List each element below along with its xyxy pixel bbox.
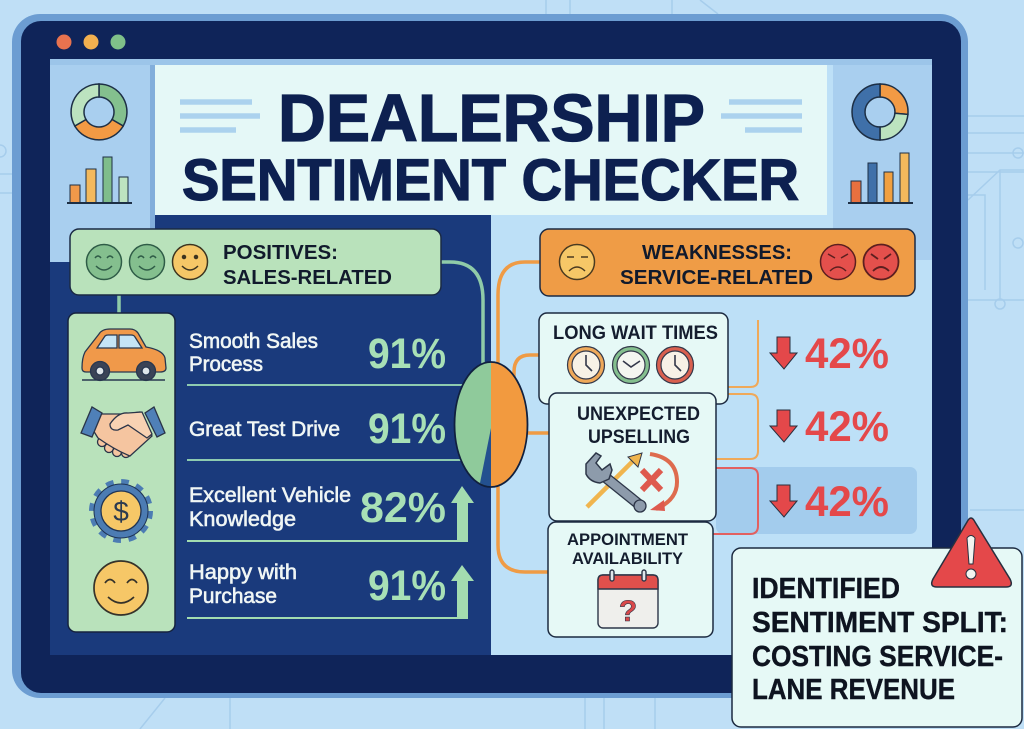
stat: first decline: 42% (805, 330, 889, 378)
icon: left donut chart (71, 84, 127, 140)
icon: neutral face (560, 244, 594, 280)
icon: angry face two (864, 244, 898, 280)
icon: gear with dollar sign (92, 482, 150, 540)
row: excellent vehicle knowledge: 82% (360, 484, 446, 532)
stat: third decline (770, 478, 889, 526)
callout: SENTIMENT SPLIT: (752, 607, 1008, 639)
icon: calendar (598, 570, 658, 628)
card: unexpected upselling: UPSELLING (588, 427, 690, 448)
right sidebar (833, 65, 932, 260)
icon: yellow face (172, 244, 208, 280)
icon: green face one (86, 244, 122, 280)
stat: third decline: 42% (805, 478, 889, 526)
icon: handshake (81, 407, 165, 458)
card: long wait times (539, 313, 728, 404)
row: great test drive: 91% (368, 405, 446, 453)
positives header (70, 229, 441, 295)
callout: IDENTIFIED (752, 573, 900, 605)
row: smooth sales process: Smooth Sales (189, 330, 318, 353)
icon: calendar: ? (619, 595, 637, 628)
icon: warning triangle (932, 518, 1011, 587)
weaknesses heading text: WEAKNESSES: (642, 242, 792, 264)
icon: orange clock (568, 346, 604, 384)
positives heading text: SALES-RELATED (223, 267, 392, 289)
left sidebar (50, 65, 155, 262)
icon: return arrow (650, 454, 677, 509)
weaknesses heading text: SERVICE-RELATED (620, 267, 813, 289)
row: happy with purchase: Happy with (189, 561, 297, 584)
row: excellent vehicle knowledge (187, 484, 474, 542)
icon: red cross (642, 470, 661, 490)
stat: first decline (770, 330, 889, 378)
icon: left bar chart (67, 157, 132, 203)
arrow: up trend one (187, 486, 474, 542)
card: appointment availability: AVAILABILITY (572, 549, 684, 568)
icon: right donut chart (852, 84, 908, 140)
row: smooth sales process: 91% (368, 330, 446, 378)
row: smooth sales process (187, 330, 465, 385)
icon: angry face one (820, 244, 856, 280)
title panel (150, 65, 827, 230)
icon: upsell arrow (587, 458, 636, 507)
icon: smiling face (94, 561, 148, 615)
callout: LANE REVENUE (752, 674, 955, 706)
positives heading text (223, 242, 392, 289)
title text (182, 81, 799, 213)
row: excellent vehicle knowledge: Excellent Vehicle (189, 484, 351, 507)
row: great test drive (187, 405, 462, 460)
stat: second decline: 42% (805, 403, 889, 451)
row: happy with purchase: Purchase (189, 585, 277, 608)
icon: green clock (612, 346, 650, 384)
row: great test drive: Great Test Drive (189, 418, 340, 441)
window control dots (56, 34, 126, 50)
card: appointment availability (548, 522, 713, 637)
positives heading text: POSITIVES: (223, 242, 338, 264)
icon: car (82, 329, 166, 380)
split oval (454, 362, 528, 487)
icon: right bar chart (848, 153, 913, 203)
icon: wrench (586, 453, 646, 512)
title text: DEALERSHIP (278, 81, 705, 156)
icon: green face two (130, 244, 164, 280)
icon: red clock (656, 346, 694, 384)
card: unexpected upselling: UNEXPECTED (577, 404, 700, 425)
callout (732, 518, 1022, 727)
row: smooth sales process: Process (189, 353, 263, 376)
connector: green sales line (119, 262, 483, 365)
dark positives panel background (50, 215, 491, 655)
row: excellent vehicle knowledge: Knowledge (189, 508, 296, 531)
title text: SENTIMENT CHECKER (182, 148, 799, 213)
row: happy with purchase: 91% (368, 562, 446, 610)
connector brackets (716, 320, 758, 459)
highlight band for third percentage (716, 467, 917, 534)
card: appointment availability: APPOINTMENT (567, 530, 689, 549)
row: happy with purchase (187, 561, 474, 619)
weaknesses header (540, 229, 915, 296)
callout: COSTING SERVICE- (752, 641, 1003, 673)
panel: positive icons (68, 313, 175, 632)
icon: return arrow head (650, 500, 665, 511)
connector: orange service lines (498, 262, 550, 572)
weaknesses heading text (620, 242, 813, 289)
connector bracket red (713, 468, 758, 534)
icon: gear with dollar sign: $ (113, 496, 129, 527)
stat: second decline (770, 403, 889, 451)
card: long wait times: LONG WAIT TIMES (553, 323, 718, 344)
card: unexpected upselling (549, 393, 716, 521)
icon: arrow head (628, 453, 642, 467)
arrow: up trend two (187, 565, 474, 619)
